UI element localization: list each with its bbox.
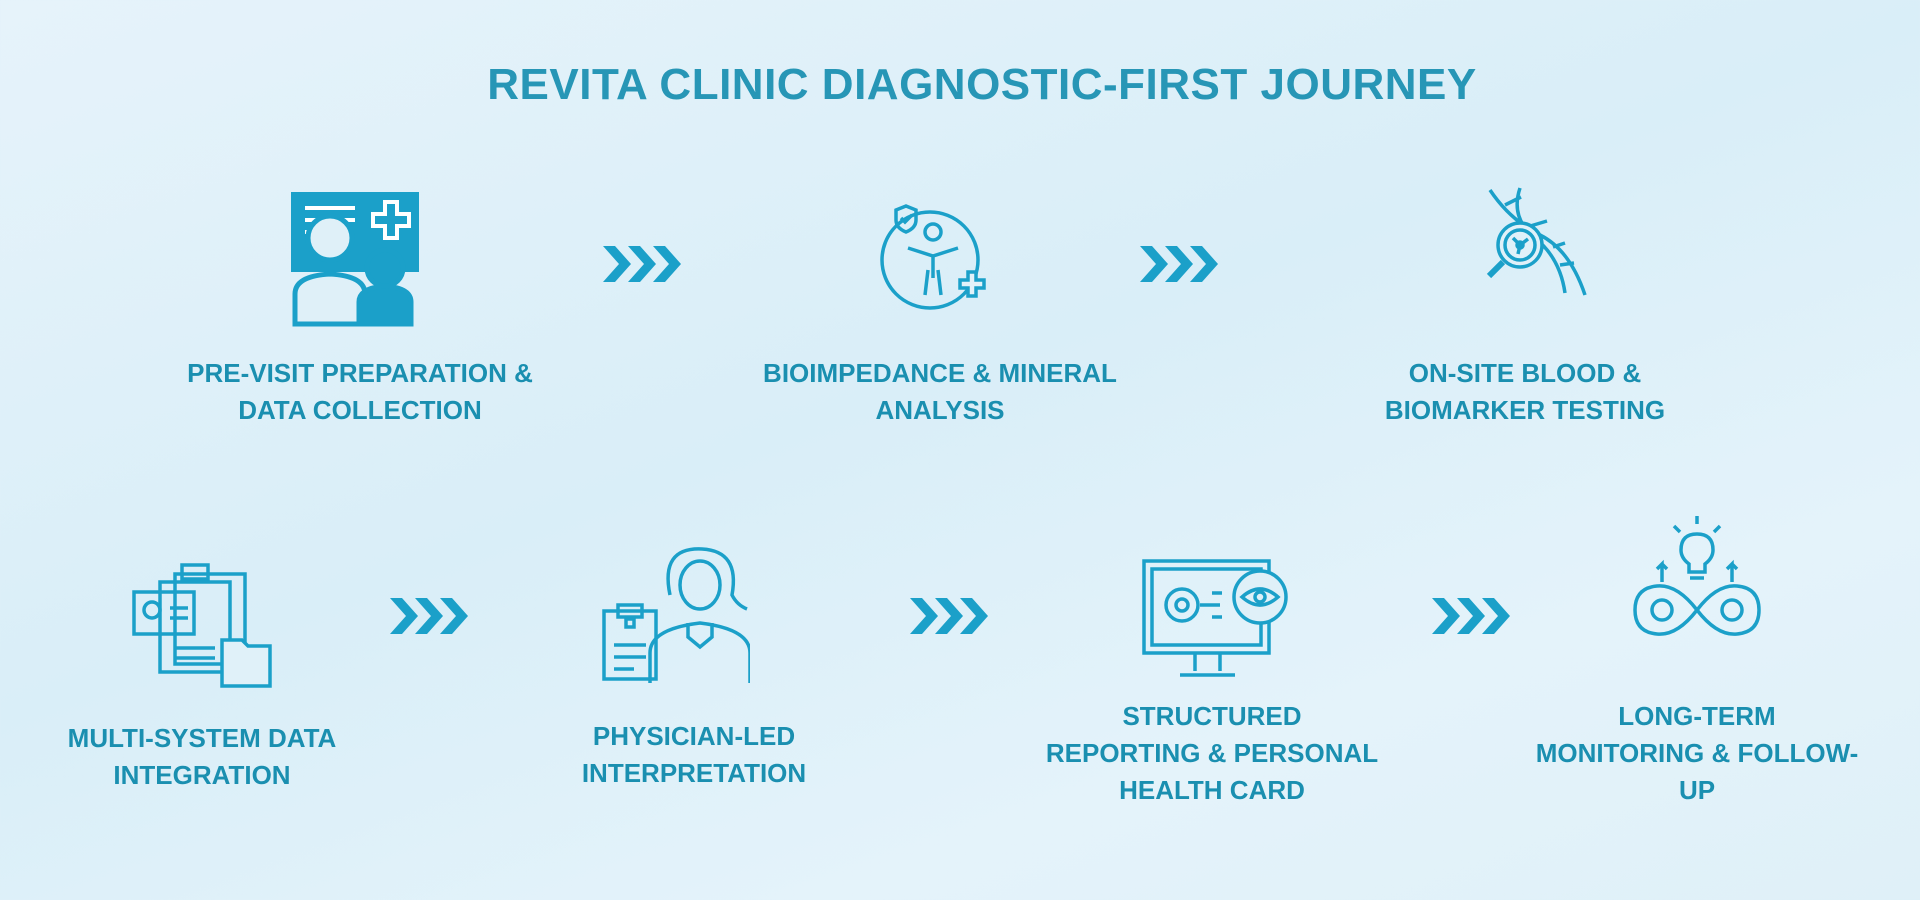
label 5: INTERPRETATION xyxy=(582,758,806,788)
arrow 5 xyxy=(910,598,988,634)
step 1: pre-visit xyxy=(291,192,419,326)
label 4: MULTI-SYSTEM DATA xyxy=(68,723,336,753)
label 3: ON-SITE BLOOD & xyxy=(1409,358,1641,388)
label 3 xyxy=(1385,358,1665,425)
step 2: bioimpedance xyxy=(880,204,986,310)
step 3: blood testing xyxy=(1486,188,1587,296)
label 7 xyxy=(1536,701,1858,805)
arrow 2 xyxy=(1140,246,1218,282)
label 3: BIOMARKER TESTING xyxy=(1385,395,1665,425)
label 7: UP xyxy=(1679,775,1715,805)
label 7: LONG-TERM xyxy=(1618,701,1776,731)
arrow 4 xyxy=(390,598,468,634)
label 7: MONITORING & FOLLOW- xyxy=(1536,738,1858,768)
arrow 6 xyxy=(1432,598,1510,634)
step 5: physician xyxy=(602,547,750,683)
label 6: STRUCTURED xyxy=(1122,701,1302,731)
label 5 xyxy=(582,721,806,788)
label 6: HEALTH CARD xyxy=(1119,775,1305,805)
step 6: reporting xyxy=(1142,559,1288,677)
arrow 1 xyxy=(603,246,681,282)
label 4 xyxy=(68,723,336,790)
label 2 xyxy=(763,358,1117,425)
label 1: PRE-VISIT PREPARATION & xyxy=(187,358,533,388)
label 1: DATA COLLECTION xyxy=(238,395,482,425)
label 6 xyxy=(1046,701,1378,805)
step 7: monitoring xyxy=(1633,516,1761,636)
title: REVITA CLINIC DIAGNOSTIC-FIRST JOURNEY xyxy=(487,60,1477,109)
label 2: ANALYSIS xyxy=(875,395,1005,425)
label 1 xyxy=(187,358,533,425)
label 4: INTEGRATION xyxy=(113,760,291,790)
label 6: REPORTING & PERSONAL xyxy=(1046,738,1378,768)
label 2: BIOIMPEDANCE & MINERAL xyxy=(763,358,1117,388)
step 4: data integration xyxy=(132,563,272,688)
label 5: PHYSICIAN-LED xyxy=(593,721,795,751)
